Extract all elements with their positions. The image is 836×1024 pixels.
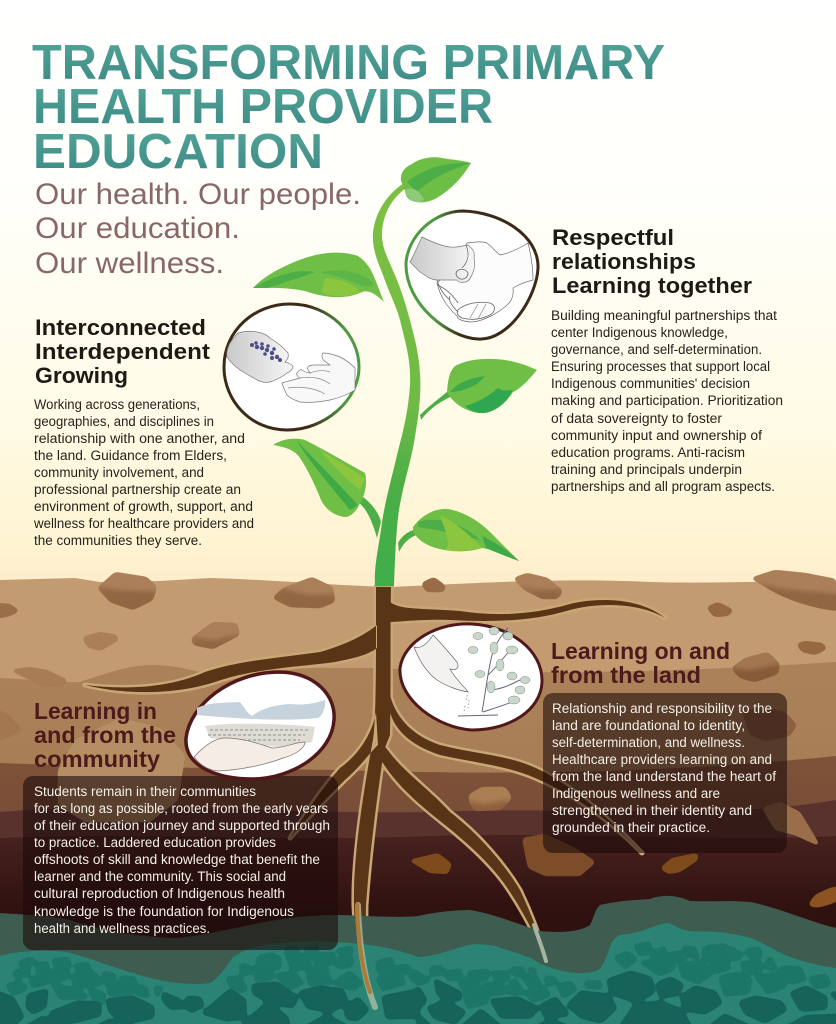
- body text: community involvement, and: [34, 465, 204, 480]
- panel: learning on the land: [543, 638, 787, 853]
- heading: [34, 698, 176, 772]
- body text: geographies, and disciplines in: [34, 414, 214, 429]
- body text: education programs. Anti-racism: [551, 445, 745, 460]
- heading: Respectful: [552, 225, 674, 250]
- sky background: [0, 0, 836, 600]
- body text: land are foundational to identity,: [552, 718, 745, 733]
- soil rocks: [0, 570, 836, 907]
- body text: [551, 308, 783, 494]
- leaf: lower left: [273, 439, 381, 538]
- heading: [35, 315, 211, 388]
- body text: community input and ownership of: [551, 428, 762, 443]
- body text: professional partnership create an: [34, 482, 241, 497]
- heading: Learning on and: [551, 638, 730, 664]
- body text: partnerships and all program aspects.: [551, 479, 775, 494]
- large water stones: [0, 972, 836, 1024]
- body text: Indigenous communities' decision: [551, 376, 750, 391]
- body text: wellness for healthcare providers and: [33, 516, 254, 531]
- body text: of their education journey and supported through: [34, 818, 330, 833]
- body text: governance, and self-determination.: [551, 342, 762, 357]
- body text: environment of growth, support, and: [34, 499, 253, 514]
- body text: learner and the community. This social and: [34, 869, 286, 884]
- body text: Relationship and responsibility to the: [552, 701, 772, 716]
- underground water: [0, 896, 836, 1024]
- body text: knowledge is the foundation for Indigenous: [34, 904, 294, 919]
- heading: relationships: [552, 249, 696, 274]
- body text: grounded in their practice.: [552, 820, 710, 835]
- panel: respectful relationships: [551, 225, 783, 494]
- body text: center Indigenous knowledge,: [551, 325, 728, 340]
- heading: [551, 638, 730, 688]
- body text: for as long as possible, rooted from the early years: [34, 801, 328, 816]
- body text: to practice. Laddered education provides: [34, 835, 276, 850]
- heading: from the land: [551, 662, 701, 688]
- body text: self-determination, and wellness.: [552, 735, 745, 750]
- heading: [552, 225, 752, 298]
- soil layers: [0, 578, 836, 1024]
- heading: Learning in: [34, 698, 157, 724]
- body text: training and principals underpin: [551, 462, 742, 477]
- heading: Growing: [35, 363, 128, 388]
- leaf: upper left: [253, 253, 384, 302]
- right hand: [437, 242, 533, 322]
- subtitle: Our education.: [35, 212, 240, 245]
- panel: interconnected: [33, 315, 254, 548]
- root tips: [357, 905, 546, 1007]
- body text: relationship with one another, and: [34, 431, 245, 446]
- stem: [373, 183, 420, 586]
- body text: Students remain in their communities: [34, 784, 256, 799]
- title: HEALTH PROVIDER: [33, 80, 493, 134]
- body text: Healthcare providers learning on and: [552, 752, 772, 767]
- right hand: [282, 353, 355, 402]
- body text: strengthened in their identity and: [552, 803, 752, 818]
- body text: making and participation. Prioritization: [551, 393, 783, 408]
- title: EDUCATION: [33, 125, 323, 179]
- heading: Interconnected: [35, 315, 206, 340]
- roots: [85, 587, 665, 1008]
- leaf: top: [401, 157, 471, 202]
- body text: Working across generations,: [34, 397, 200, 412]
- body text: from the land understand the heart of: [552, 769, 776, 784]
- icon: planting by hand: [400, 624, 542, 730]
- plant: [253, 157, 537, 586]
- body text: offshoots of skill and knowledge that benefit the: [34, 852, 320, 867]
- left hand: [410, 237, 475, 282]
- title: TRANSFORMING PRIMARY: [32, 36, 665, 90]
- leaf: right: [420, 359, 537, 420]
- heading: Learning together: [552, 273, 752, 298]
- body text: [33, 397, 254, 548]
- text box: [23, 776, 338, 950]
- body text: Ensuring processes that support local: [551, 359, 770, 374]
- body text: [34, 784, 330, 936]
- body text: of data sovereignty to foster: [551, 411, 723, 426]
- heading: and from the: [34, 722, 176, 748]
- body text: cultural reproduction of Indigenous health: [34, 886, 285, 901]
- heading: Interdependent: [35, 339, 211, 364]
- body text: Indigenous wellness and are: [552, 786, 720, 801]
- icon: hands sharing seeds: [224, 304, 359, 430]
- water stones: [7, 943, 830, 1008]
- subtitle: Our health. Our people.: [35, 178, 361, 211]
- body text: [552, 701, 776, 835]
- body text: Building meaningful partnerships that: [551, 308, 777, 323]
- leaf: lower right: [398, 509, 519, 561]
- subtitle: Our wellness.: [35, 247, 224, 280]
- title: [32, 36, 665, 179]
- body text: the land. Guidance from Elders,: [34, 448, 227, 463]
- text box: [543, 693, 787, 853]
- heading: community: [34, 746, 160, 772]
- body text: the communities they serve.: [34, 533, 202, 548]
- icon: hand holding community: [186, 672, 334, 779]
- subtitle: [35, 178, 361, 280]
- body text: health and wellness practices.: [34, 921, 210, 936]
- panel: learning in the community: [23, 698, 338, 950]
- icon: handshake: [406, 211, 538, 339]
- left hand with seeds: [227, 331, 293, 382]
